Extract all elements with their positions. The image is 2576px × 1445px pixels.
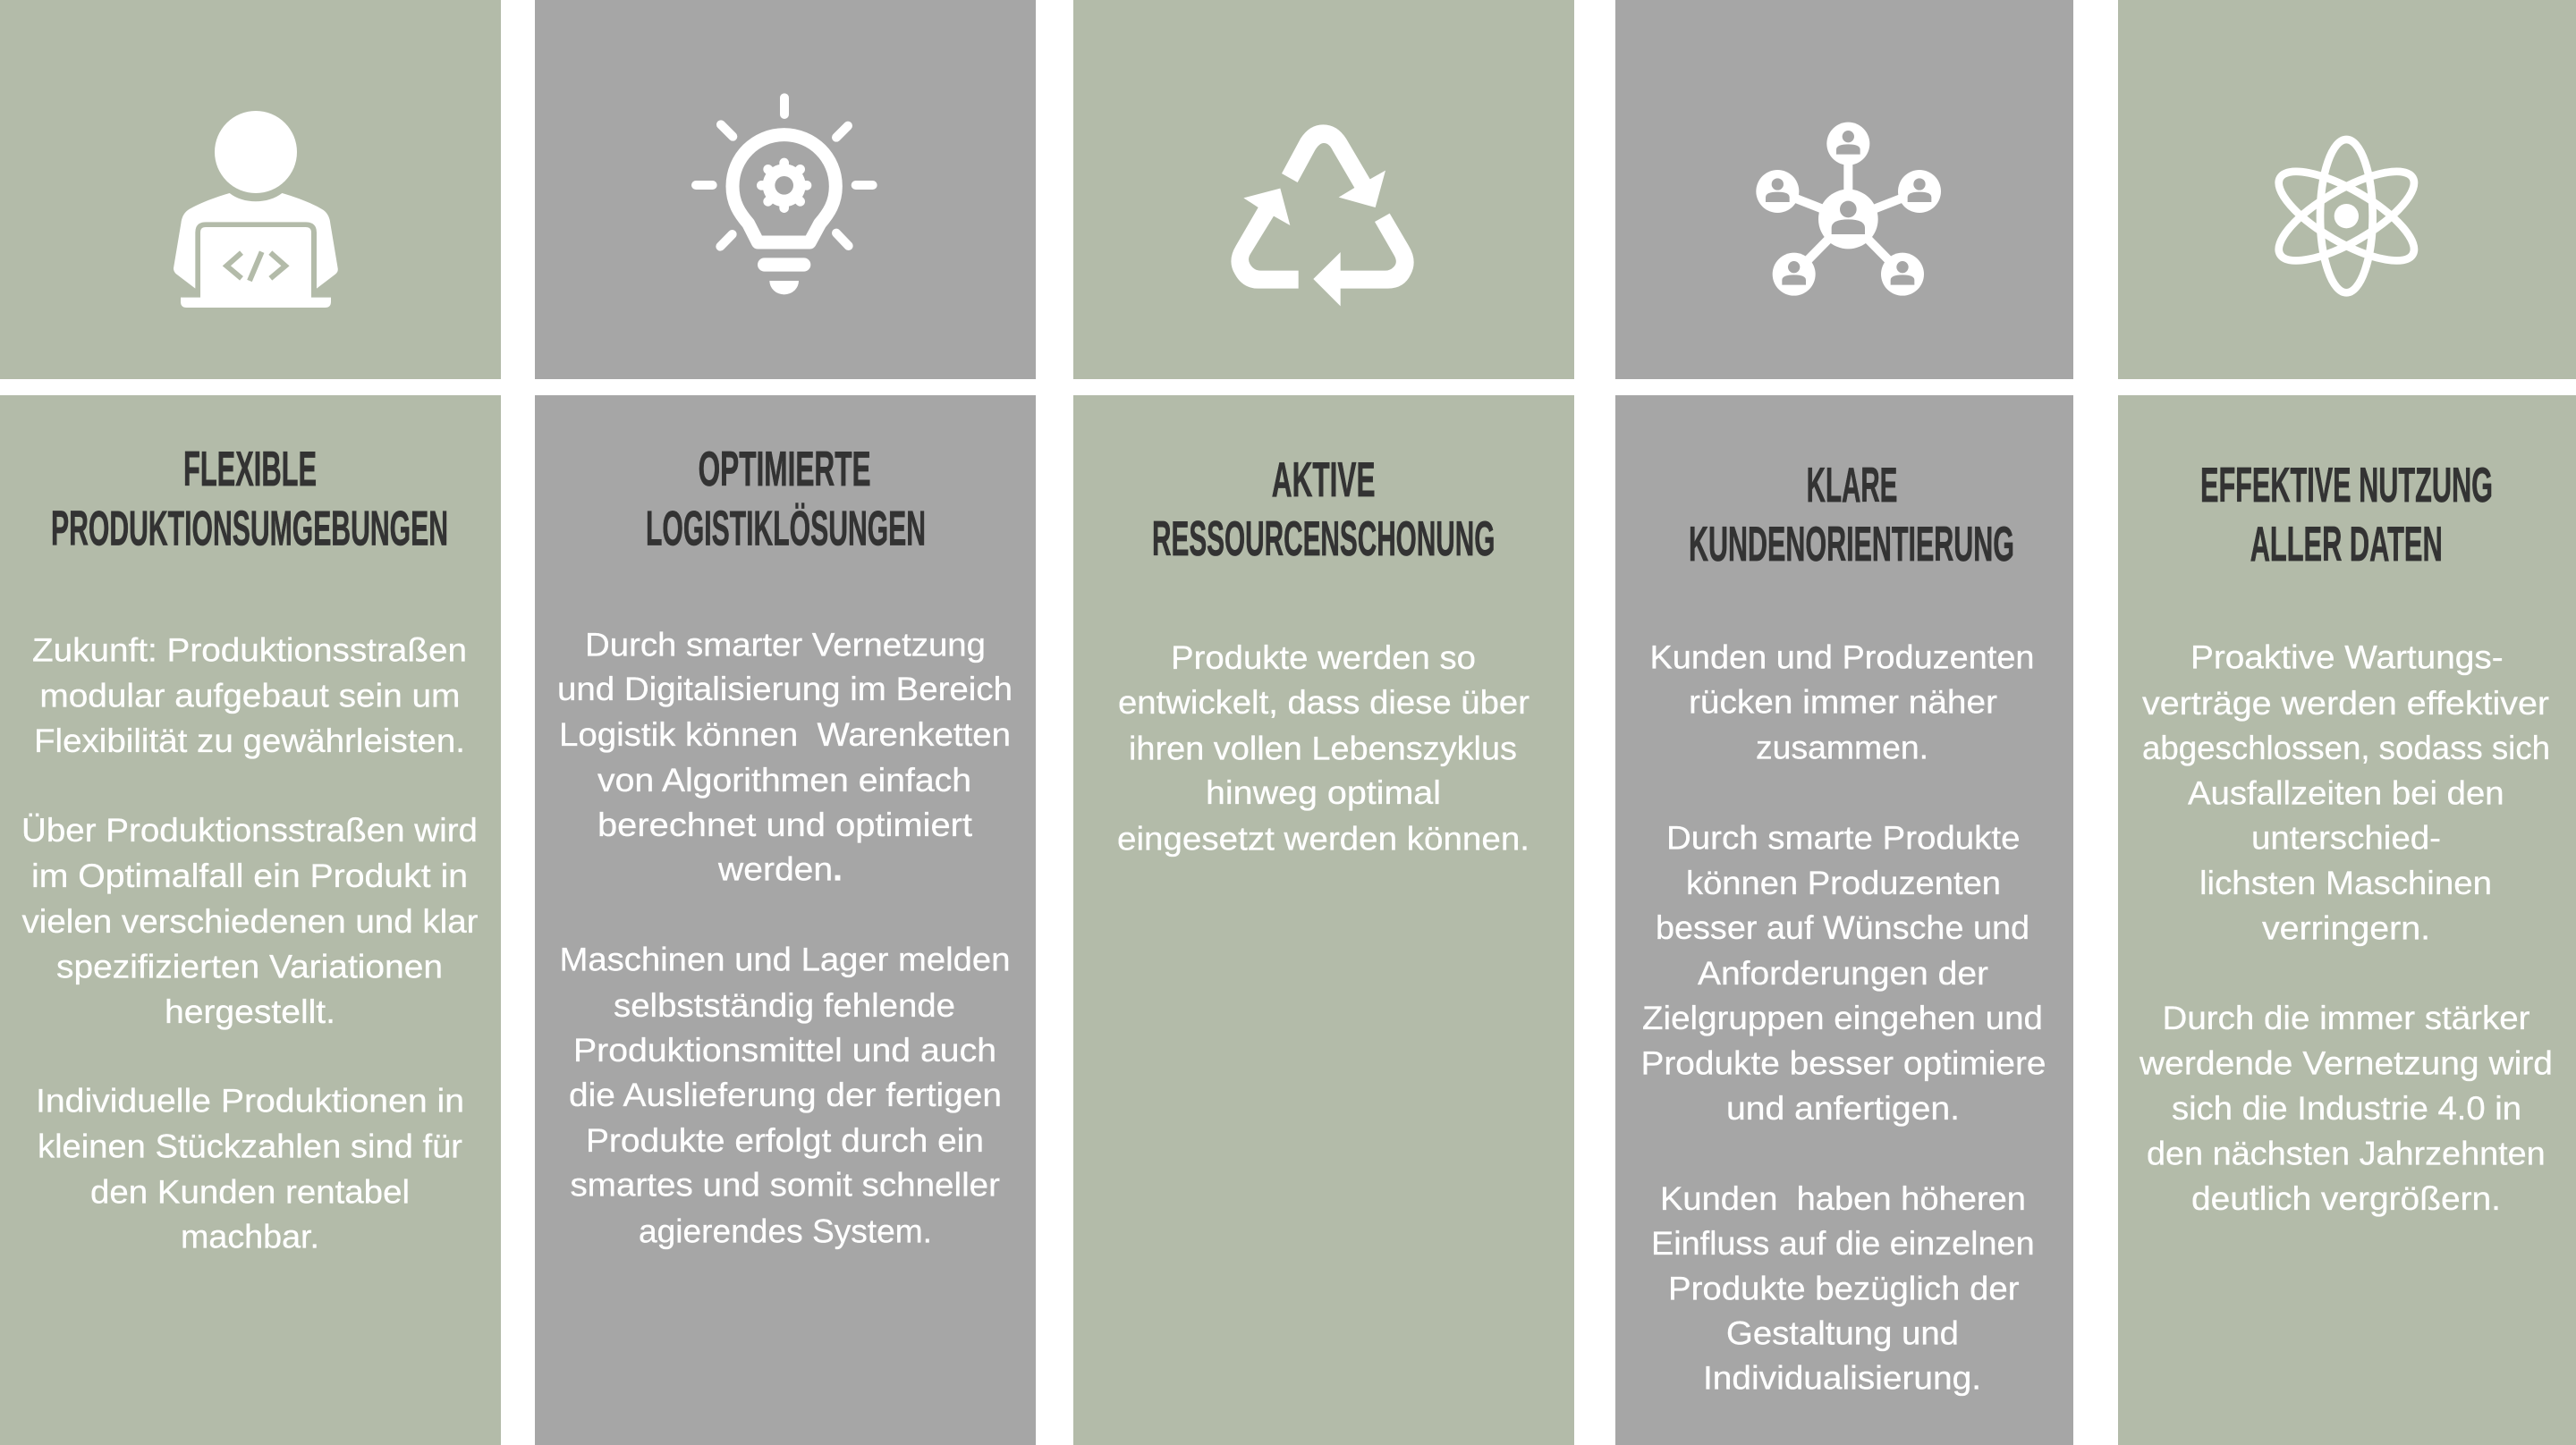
text block: column 1: modular aufgebaut sein um <box>39 678 460 714</box>
text block: column 1: spezifizierten Variationen <box>56 948 443 985</box>
text block: column 5: lichsten Maschinen <box>2199 865 2492 901</box>
icon tile: network <box>1615 0 2073 379</box>
icon: light bulb with gear <box>696 97 873 294</box>
text block: column 4: Individualisierung. <box>1703 1359 1981 1397</box>
text block: column 4: Kunden und Produzenten <box>1649 638 2034 676</box>
text block: column 2: smartes und somit schneller <box>571 1166 1000 1203</box>
text block: column 3: Produkte werden so <box>1171 639 1476 676</box>
text block: column 5: Durch die immer stärker <box>2163 1000 2529 1036</box>
text block: column 1: Über Produktionsstraßen wird <box>21 812 478 849</box>
text block: column 1: kleinen Stückzahlen sind für <box>38 1128 462 1165</box>
panel: column 4 customers <box>1615 0 2073 1445</box>
text block: column 5: deutlich vergrößern. <box>2191 1180 2501 1217</box>
text block: column 2: und Digitalisierung im Bereich <box>557 671 1013 707</box>
heading: flexible produktionsumgebungen: FLEXIBLE <box>183 441 317 496</box>
heading: aktive ressourcenschonung: AKTIVE <box>1272 452 1376 507</box>
heading: aktive ressourcenschonung: RESSOURCENSCHONUNG <box>1152 511 1495 566</box>
icon tile: light bulb <box>535 0 1036 379</box>
icon: customer network <box>1756 123 1941 296</box>
text block: column 2: Logistik können Warenketten <box>559 716 1011 753</box>
text block: column 2: Maschinen und Lager melden <box>560 941 1011 977</box>
text block: column 4: Kunden haben höheren <box>1660 1180 2026 1217</box>
text block: column 4: besser auf Wünsche und <box>1656 909 2029 946</box>
heading: aktive ressourcenschonung <box>1152 452 1495 566</box>
text block: column 5: abgeschlossen, sodass sich <box>2142 730 2550 766</box>
content panel: column 5 <box>2118 395 2576 1445</box>
text block: column 5 <box>2139 638 2553 1217</box>
heading: flexible produktionsumgebungen: PRODUKTIONSUMGEBUNGEN <box>51 501 448 556</box>
icon: atom <box>2267 139 2426 292</box>
text block: column 5: unterschied- <box>2251 819 2441 857</box>
text block: column 2: werden. <box>717 850 843 887</box>
heading: flexible produktionsumgebungen <box>51 441 448 556</box>
text block: column 5: Proaktive Wartungs- <box>2190 638 2504 676</box>
heading: effektive nutzung aller daten <box>2200 457 2493 571</box>
text block: column 3: entwickelt, dass diese über <box>1118 684 1530 721</box>
text block: column 4: Einfluss auf die einzelnen <box>1651 1225 2035 1262</box>
text block: column 3: hinweg optimal <box>1206 774 1441 811</box>
text block: column 5: Ausfallzeiten bei den <box>2188 774 2504 812</box>
text block: column 4: Produkte bezüglich der <box>1668 1270 2020 1307</box>
text block: column 5: verringern. <box>2262 910 2430 946</box>
content panel: column 2 <box>535 395 1036 1445</box>
text block: column 1: vielen verschiedenen und klar <box>21 903 478 940</box>
icon tile: recycling <box>1073 0 1574 379</box>
icon: recycling arrows <box>1231 124 1414 306</box>
content panel: column 3 <box>1073 395 1574 1445</box>
text block: column 1: machbar. <box>181 1219 319 1255</box>
text block: column 4: Gestaltung und <box>1726 1314 1959 1352</box>
text block: column 2: Durch smarter Vernetzung <box>585 626 986 663</box>
text block: column 5: verträge werden effektiver <box>2142 685 2549 722</box>
panel: column 3 resources <box>1073 0 1574 1445</box>
heading: klare kundenorientierung: KLARE <box>1807 457 1897 512</box>
text block: column 3 <box>1117 639 1530 857</box>
content panel: column 4 <box>1615 395 2073 1445</box>
text block: column 1: Zukunft: Produktionsstraßen <box>32 631 467 669</box>
text block: column 4: können Produzenten <box>1686 865 2001 901</box>
icon: developer with laptop <box>174 111 338 308</box>
text block: column 2: Produkte erfolgt durch ein <box>586 1122 984 1159</box>
text block: column 5: sich die Industrie 4.0 in <box>2172 1090 2521 1127</box>
text block: column 1 <box>21 631 478 1255</box>
panel: column 2 logistics <box>535 0 1036 1445</box>
heading: optimierte logistiklösungen: OPTIMIERTE <box>699 441 871 496</box>
heading: klare kundenorientierung <box>1689 457 2014 571</box>
text block: column 4: und anfertigen. <box>1726 1090 1960 1127</box>
panel: column 1 flexible production <box>0 0 501 1445</box>
text block: column 1: im Optimalfall ein Produkt in <box>31 858 468 894</box>
text block: column 4 <box>1640 638 2046 1397</box>
text block: column 1: Flexibilität zu gewährleisten. <box>34 722 465 759</box>
text block: column 4: zusammen. <box>1756 730 1928 765</box>
text block: column 5: werdende Vernetzung wird <box>2139 1044 2553 1082</box>
text block: column 1: Individuelle Produktionen in <box>36 1083 464 1120</box>
text block: column 2: von Algorithmen einfach <box>597 762 971 799</box>
text block: column 2: agierendes System. <box>639 1213 932 1250</box>
heading: optimierte logistiklösungen <box>646 441 926 556</box>
text block: column 2: berechnet und optimiert <box>597 807 973 843</box>
text block: column 4: Zielgruppen eingehen und <box>1642 1000 2043 1036</box>
heading: klare kundenorientierung: KUNDENORIENTIERUNG <box>1689 516 2014 571</box>
text block: column 3: ihren vollen Lebenszyklus <box>1129 730 1517 767</box>
text block: column 4: Durch smarte Produkte <box>1666 819 2020 857</box>
icon tile: atom <box>2118 0 2576 379</box>
text block: column 4: Produkte besser optimiere <box>1640 1044 2046 1082</box>
text block: column 4: Anforderungen der <box>1698 955 1988 992</box>
panel: column 5 data <box>2118 0 2576 1445</box>
text block: column 1: den Kunden rentabel <box>90 1174 410 1211</box>
text block: column 2: Produktionsmittel und auch <box>573 1032 996 1069</box>
text block: column 1: hergestellt. <box>165 993 335 1030</box>
text block: column 2 <box>557 626 1013 1250</box>
text block: column 5: den nächsten Jahrzehnten <box>2147 1136 2546 1171</box>
text block: column 2: selbstständig fehlende <box>614 987 955 1024</box>
text block: column 3: eingesetzt werden können. <box>1117 821 1530 857</box>
heading: optimierte logistiklösungen: LOGISTIKLÖSUNGEN <box>646 501 926 556</box>
text block: column 4: rücken immer näher <box>1689 683 1997 721</box>
content panel: column 1 <box>0 395 501 1445</box>
icon tile: developer <box>0 0 501 379</box>
text block: column 2: die Auslieferung der fertigen <box>569 1077 1002 1113</box>
